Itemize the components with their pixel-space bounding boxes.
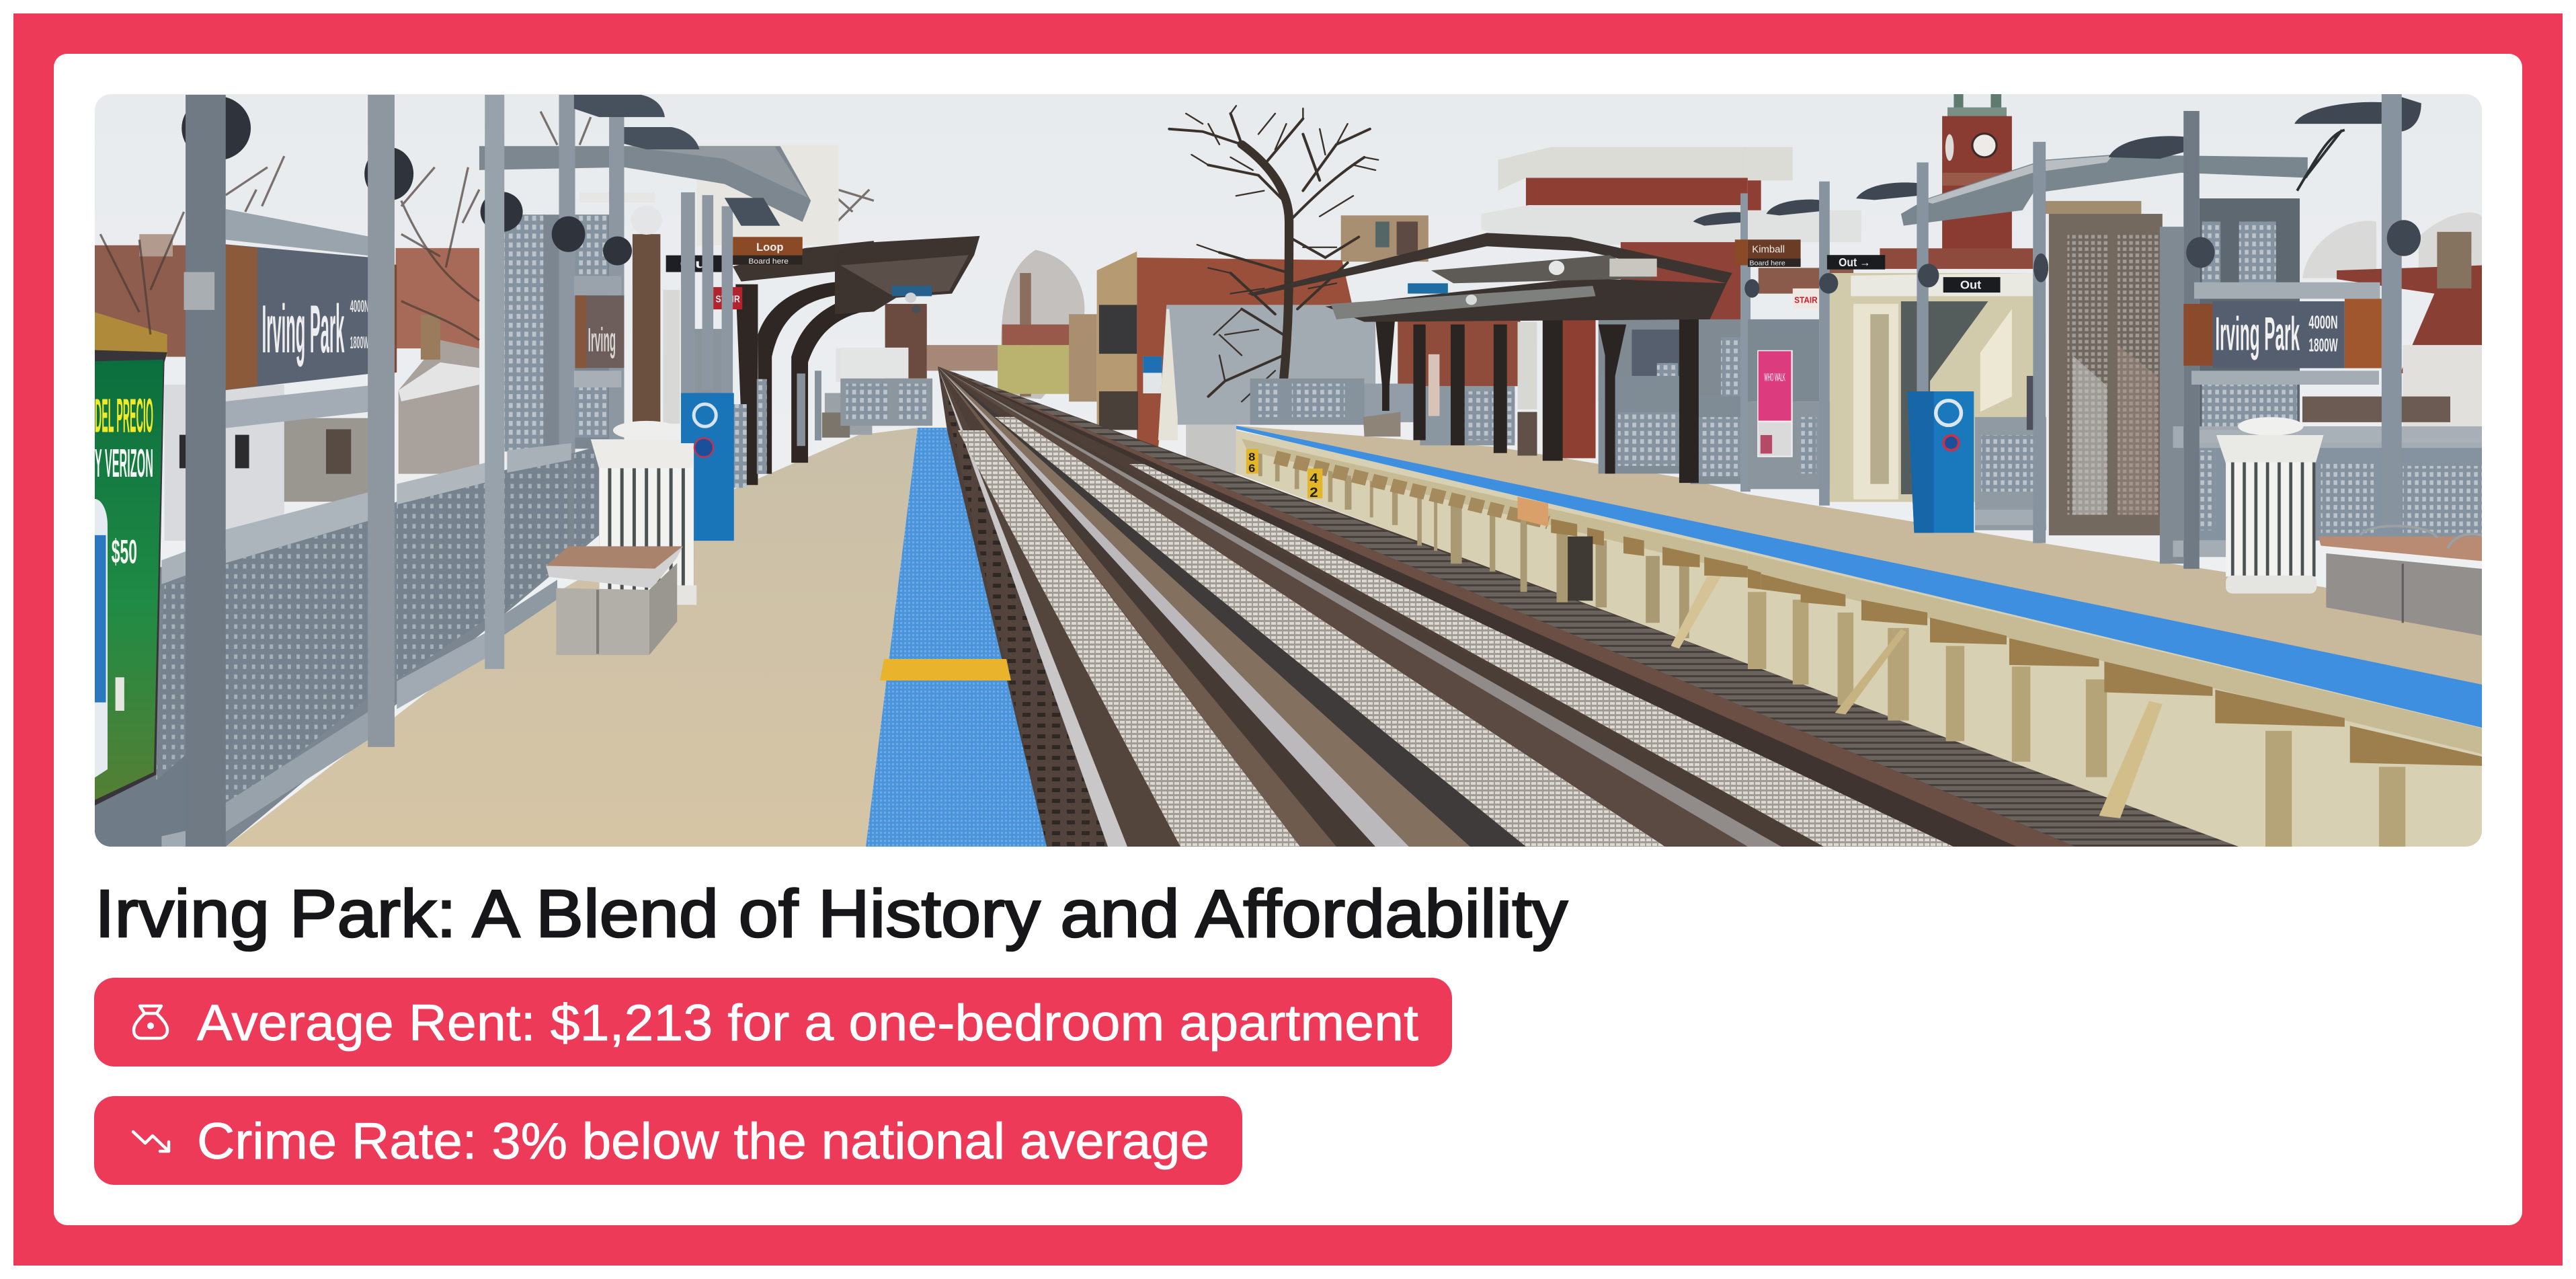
left platform scene: Irving Park xyxy=(262,291,344,367)
Loop and stair signs: Board here xyxy=(748,258,789,266)
text: average rent: Average Rent: $1,213 for a one-bedroom apartment xyxy=(197,995,1418,1052)
green poster xyxy=(95,350,167,806)
second station sign xyxy=(574,276,624,387)
overhead platform signs: STAIR xyxy=(1794,295,1818,305)
blue tactile strip left xyxy=(866,428,1047,847)
white band and brick base xyxy=(1748,147,1793,180)
blue recycling bin xyxy=(1907,391,1974,533)
overhead platform signs: Out xyxy=(1960,278,1981,292)
station sign left with rails: 4000N xyxy=(350,297,369,316)
text: crime rate: Crime Rate: 3% below the national average xyxy=(197,1113,1209,1170)
icon: trending down arrow xyxy=(133,1132,169,1151)
left platform scene: Irving xyxy=(588,321,616,358)
bench right xyxy=(2319,526,2482,635)
left platform scene xyxy=(95,95,874,847)
station sign left with rails xyxy=(225,209,397,428)
station sign right: 4000N xyxy=(2308,312,2338,333)
poles near xyxy=(485,95,504,669)
green poster: $50 xyxy=(112,533,137,570)
rooftops and bare trees xyxy=(95,245,187,357)
background buildings centre xyxy=(927,106,1748,473)
right platform floor xyxy=(1236,426,2482,686)
Loop and stair signs: Loop xyxy=(756,241,783,254)
fence right xyxy=(2197,442,2482,541)
far canopy left xyxy=(733,241,874,282)
house right xyxy=(2337,266,2482,373)
pink advert xyxy=(1757,350,1793,457)
far left canopy and fence at end of platform xyxy=(835,236,980,426)
sky xyxy=(95,94,2482,847)
left fence near stairs xyxy=(1748,319,1819,401)
poles far xyxy=(559,95,733,552)
railway tracks xyxy=(938,366,2259,847)
clock tower xyxy=(1942,94,2012,252)
bench left xyxy=(546,546,683,655)
trash can left xyxy=(591,421,700,605)
upper lamps xyxy=(182,95,780,266)
overhead platform signs: Out → xyxy=(1839,256,1870,269)
right platform station background: WHO WALK xyxy=(1764,371,1785,384)
Loop and stair signs: STAIR xyxy=(715,293,740,305)
photo: Irving Park elevated station xyxy=(95,94,2482,854)
right platform station background xyxy=(1744,94,2482,635)
hazy trees right xyxy=(2302,221,2376,278)
blue platform edge right xyxy=(1236,426,2482,728)
elevated platform steel structure: 2 xyxy=(1310,485,1318,500)
elevated platform steel structure xyxy=(1236,430,2482,854)
left platform floor xyxy=(226,428,918,847)
poles xyxy=(1819,94,2402,569)
bare tree xyxy=(1169,106,1378,401)
left platform scene: Y VERIZON xyxy=(95,440,153,486)
overhead platform signs xyxy=(1748,239,2001,309)
shelter behind panels xyxy=(2200,198,2300,430)
lamps xyxy=(1744,97,2421,298)
Loop and stair signs: Out xyxy=(680,257,713,271)
trash can right xyxy=(2216,417,2323,594)
fences xyxy=(1250,379,1365,425)
stairway entrance xyxy=(1830,273,2033,502)
Loop and stair signs xyxy=(666,237,803,309)
pole and lamp at right of canopy xyxy=(1740,193,1750,492)
overhead platform signs: Board here xyxy=(1749,260,1785,267)
near fence panels xyxy=(95,443,599,847)
building behind canopy xyxy=(696,145,839,245)
far fence section xyxy=(1975,417,2046,530)
station sign right xyxy=(2183,282,2382,385)
canopy left near xyxy=(479,146,811,222)
right canopy and far platform fittings xyxy=(1247,193,1750,492)
elevated platform steel structure: 4 xyxy=(1310,471,1318,486)
station sign left with rails: 1800W xyxy=(350,334,369,352)
shelter roof xyxy=(1901,155,2308,226)
columns xyxy=(1375,314,1699,483)
stat pill: average rent xyxy=(94,978,1452,1067)
blue bin left xyxy=(681,393,734,541)
left platform scene: DEL PRECIO xyxy=(95,389,153,442)
elevated platform steel structure: 8 xyxy=(1248,451,1255,463)
elevator mesh doors xyxy=(2049,214,2163,535)
upper fence right canopy xyxy=(1599,319,1748,401)
stat pill: crime rate xyxy=(94,1096,1242,1185)
overhead platform signs: Kimball xyxy=(1752,245,1785,255)
canopy roof xyxy=(1247,233,1732,296)
elevated platform steel structure: 6 xyxy=(1248,462,1255,475)
title: Irving Park: A Blend of History and Affordability xyxy=(95,876,1568,952)
station sign right: 1800W xyxy=(2308,335,2338,355)
station sign right: Irving Park xyxy=(2215,308,2300,361)
mesh panels xyxy=(504,215,545,451)
icon: money bag xyxy=(134,1006,167,1038)
white cap building xyxy=(1498,147,1748,191)
